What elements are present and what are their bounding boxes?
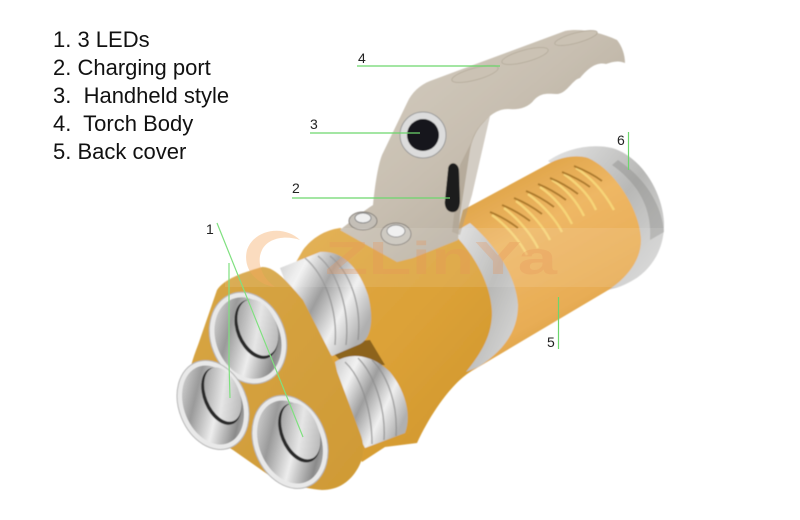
lens: top — [196, 281, 300, 395]
callout numbers: 5 — [547, 334, 555, 350]
screws — [349, 212, 411, 245]
handle shaded side — [452, 116, 490, 235]
lens: left — [164, 350, 262, 460]
lens: right — [239, 384, 341, 500]
feature list: 3. Handheld style — [53, 83, 229, 108]
callout 3 line — [310, 132, 420, 134]
callout 2 line — [292, 197, 450, 199]
callout numbers — [206, 50, 625, 350]
back cover ring — [548, 146, 664, 290]
handle — [340, 30, 625, 262]
lower ribbed neck — [335, 356, 408, 448]
front body — [280, 228, 492, 462]
power button — [400, 112, 446, 158]
callout numbers: 6 — [617, 132, 625, 148]
upper ribbed neck — [280, 252, 371, 356]
callout 4 line — [357, 65, 500, 67]
charging port — [445, 163, 460, 212]
callout 5 line — [558, 297, 560, 349]
feature list — [53, 27, 229, 164]
fins — [492, 168, 614, 255]
callout numbers: 1 — [206, 221, 214, 237]
middle silver ring — [453, 223, 518, 372]
callout numbers: 4 — [358, 50, 366, 66]
watermark: ZLinYa — [325, 232, 558, 284]
feature list: 4. Torch Body — [53, 111, 193, 136]
watermark — [225, 228, 665, 287]
callout numbers: 2 — [292, 180, 300, 196]
back tube — [440, 156, 641, 372]
flashlight body — [164, 27, 664, 500]
callout 6 line — [628, 132, 630, 170]
callout 1 lines — [217, 223, 303, 437]
triangular head plate — [183, 267, 363, 490]
callout numbers: 3 — [310, 116, 318, 132]
feature list: 5. Back cover — [53, 139, 186, 164]
ring shadow edge — [612, 160, 664, 240]
handle grips — [450, 27, 599, 86]
feature list: 1. 3 LEDs — [53, 27, 150, 52]
feature list: 2. Charging port — [53, 55, 211, 80]
shadow between necks — [325, 340, 385, 365]
